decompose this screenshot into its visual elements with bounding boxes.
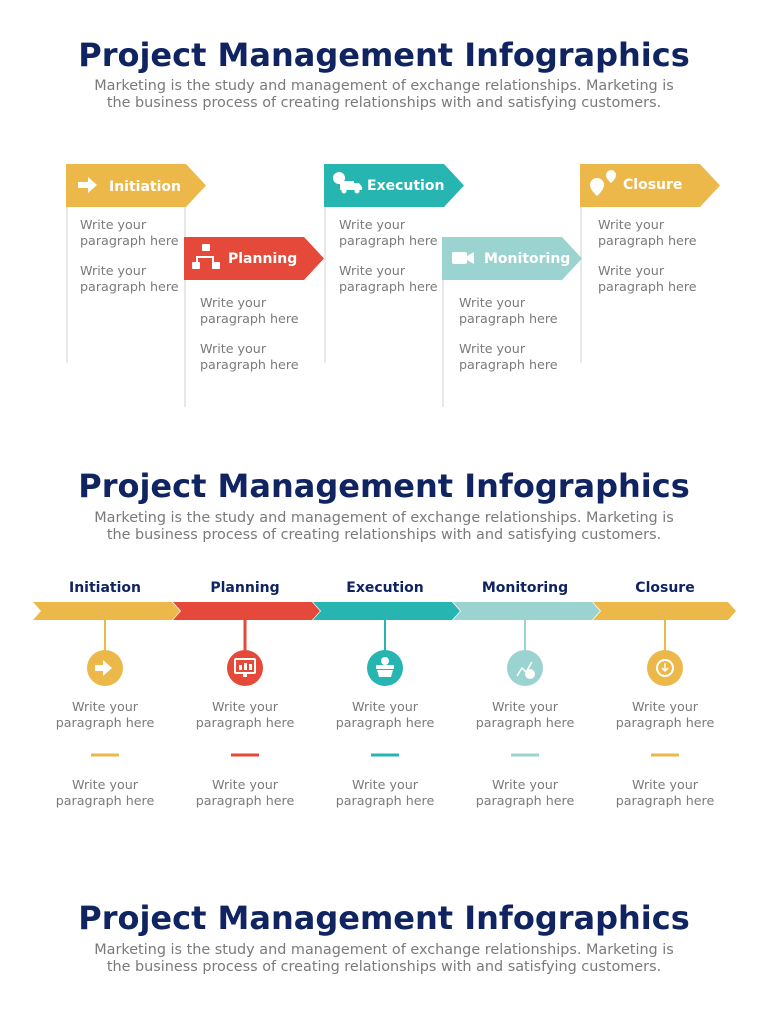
paragraphs section 1: Write your bbox=[598, 263, 665, 278]
paragraphs section 2: paragraph here bbox=[616, 793, 714, 808]
paragraphs section 1: paragraph here bbox=[598, 233, 697, 248]
banner: Initiation: Initiation bbox=[109, 179, 181, 195]
paragraphs section 1: Write your bbox=[200, 341, 267, 356]
section 2 headings: Execution bbox=[346, 580, 424, 596]
paragraphs section 1: paragraph here bbox=[80, 233, 179, 248]
section 2 headings bbox=[69, 580, 695, 596]
paragraphs section 2: Write your bbox=[352, 699, 419, 714]
section 2 headings: Closure bbox=[635, 580, 695, 596]
paragraphs section 2: paragraph here bbox=[336, 793, 434, 808]
paragraphs section 2: Write your bbox=[72, 699, 139, 714]
icon: monitor circle bbox=[227, 650, 263, 686]
paragraphs section 2: paragraph here bbox=[56, 793, 154, 808]
subtitle 3: the business process of creating relationships with and satisfying customers. bbox=[107, 959, 661, 975]
paragraphs section 2: Write your bbox=[492, 777, 559, 792]
paragraphs section 1: paragraph here bbox=[80, 279, 179, 294]
banner: Monitoring bbox=[442, 237, 582, 280]
title 1: Project Management Infographics bbox=[78, 36, 690, 74]
paragraphs section 1: paragraph here bbox=[598, 279, 697, 294]
paragraphs section 2: paragraph here bbox=[476, 715, 574, 730]
paragraphs section 1: paragraph here bbox=[339, 279, 438, 294]
section 2 headings: Initiation bbox=[69, 580, 141, 596]
banner: Execution: Execution bbox=[367, 178, 444, 194]
paragraphs section 1: Write your bbox=[200, 295, 267, 310]
paragraphs section 1: paragraph here bbox=[200, 311, 299, 326]
paragraphs section 2: paragraph here bbox=[56, 715, 154, 730]
banner: Monitoring: Monitoring bbox=[484, 251, 570, 267]
icon: download circle bbox=[647, 650, 683, 686]
subtitle 1: Marketing is the study and management of exchange relationships. Marketing is bbox=[94, 78, 674, 94]
subtitle 2 bbox=[94, 510, 674, 543]
banner: Closure bbox=[580, 164, 720, 207]
paragraphs section 2 bbox=[56, 699, 714, 808]
paragraphs section 2: paragraph here bbox=[616, 715, 714, 730]
icon: basket circle bbox=[367, 650, 403, 686]
dashes bbox=[91, 754, 679, 756]
banner: Initiation bbox=[66, 164, 206, 207]
paragraphs section 2: Write your bbox=[72, 777, 139, 792]
paragraphs section 2: paragraph here bbox=[196, 793, 294, 808]
paragraphs section 1: Write your bbox=[339, 217, 406, 232]
paragraphs section 2: paragraph here bbox=[196, 715, 294, 730]
paragraphs section 1: Write your bbox=[80, 263, 147, 278]
paragraphs section 2: Write your bbox=[352, 777, 419, 792]
banner: Planning bbox=[184, 237, 324, 280]
subtitle 1: the business process of creating relationships with and satisfying customers. bbox=[107, 95, 661, 111]
paragraphs section 1 bbox=[80, 217, 697, 372]
subtitle 3: Marketing is the study and management of exchange relationships. Marketing is bbox=[94, 942, 674, 958]
paragraphs section 2: Write your bbox=[632, 777, 699, 792]
title 3: Project Management Infographics bbox=[78, 899, 690, 937]
section 2 headings: Planning bbox=[210, 580, 280, 596]
paragraphs section 1: paragraph here bbox=[200, 357, 299, 372]
paragraphs section 2: Write your bbox=[212, 699, 279, 714]
section 2 headings: Monitoring bbox=[482, 580, 568, 596]
paragraphs section 1: paragraph here bbox=[459, 311, 558, 326]
paragraphs section 2: paragraph here bbox=[476, 793, 574, 808]
paragraphs section 1: Write your bbox=[598, 217, 665, 232]
icon: arrow circle bbox=[87, 650, 123, 686]
banner: Execution bbox=[324, 164, 464, 207]
paragraphs section 1: paragraph here bbox=[339, 233, 438, 248]
paragraphs section 1: Write your bbox=[459, 341, 526, 356]
paragraphs section 1: Write your bbox=[80, 217, 147, 232]
paragraphs section 2: paragraph here bbox=[336, 715, 434, 730]
title 2: Project Management Infographics bbox=[78, 467, 690, 505]
subtitle 1 bbox=[94, 78, 674, 111]
paragraphs section 2: Write your bbox=[632, 699, 699, 714]
paragraphs section 2: Write your bbox=[212, 777, 279, 792]
subtitle 3 bbox=[94, 942, 674, 975]
subtitle 2: the business process of creating relationships with and satisfying customers. bbox=[107, 527, 661, 543]
section 2 arrow timeline bbox=[33, 602, 736, 620]
paragraphs section 1: paragraph here bbox=[459, 357, 558, 372]
subtitle 2: Marketing is the study and management of exchange relationships. Marketing is bbox=[94, 510, 674, 526]
banner: Planning: Planning bbox=[228, 251, 297, 267]
paragraphs section 1: Write your bbox=[339, 263, 406, 278]
paragraphs section 1: Write your bbox=[459, 295, 526, 310]
paragraphs section 2: Write your bbox=[492, 699, 559, 714]
banner: Closure: Closure bbox=[623, 177, 682, 193]
icon: chart coin circle bbox=[507, 650, 543, 686]
stems and icons bbox=[105, 620, 665, 652]
